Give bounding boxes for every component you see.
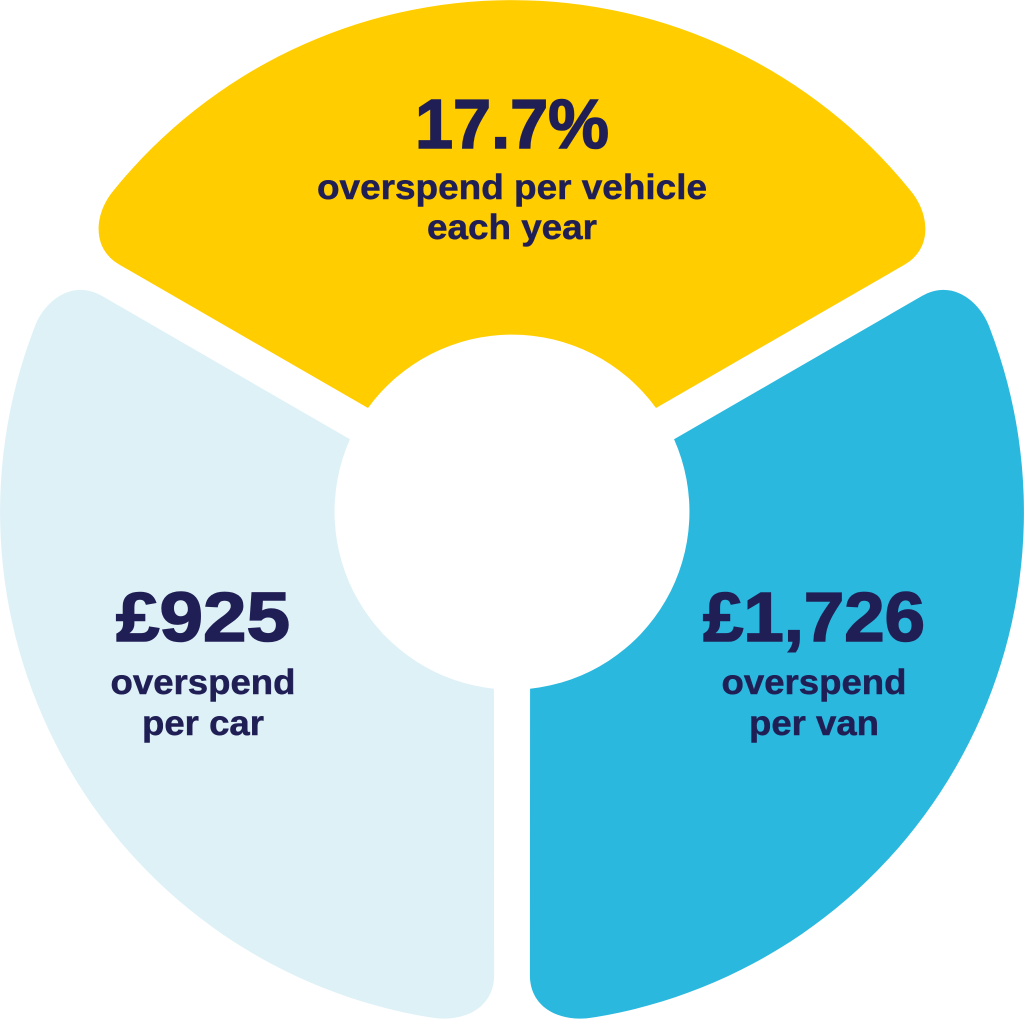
panel: vehicle overspend xyxy=(99,0,925,408)
label: overspend per vehicle each year: each year xyxy=(427,208,597,247)
label: overspend per car: per car xyxy=(142,704,264,743)
panel: car overspend xyxy=(0,290,494,1019)
stat: £1,726: £1,726 xyxy=(703,578,925,656)
label: overspend per vehicle each year: overspend per vehicle xyxy=(317,168,707,207)
panel: van overspend xyxy=(530,290,1024,1019)
stat: £925: £925 xyxy=(116,578,290,656)
label: overspend per van: per van xyxy=(749,704,879,743)
label: overspend per van: overspend xyxy=(722,663,906,702)
stat: 17.7%: 17.7% xyxy=(415,85,609,163)
label: overspend per car: overspend xyxy=(110,663,296,702)
